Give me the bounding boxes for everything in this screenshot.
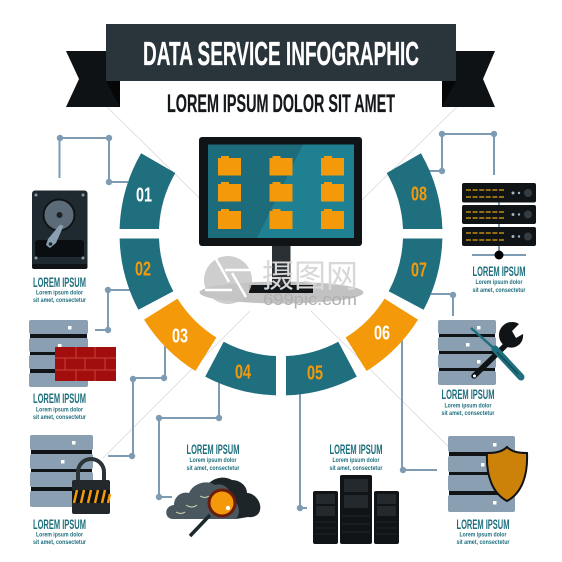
label 3: sit amet, consectetur — [33, 540, 87, 546]
label 6: LOREM IPSUM — [456, 517, 510, 532]
ring of eight numbered segments — [120, 153, 442, 395]
label 4: sit amet, consectetur — [186, 466, 240, 472]
label 1: Lorem ipsum dolor — [36, 290, 84, 296]
label 6: Lorem ipsum dolor — [460, 532, 507, 538]
label 2: sit amet, consectetur — [33, 415, 87, 421]
segment 06: 06 — [374, 322, 390, 344]
ribbon banner — [66, 24, 495, 107]
segment 07: 07 — [411, 260, 427, 282]
label 4: Lorem ipsum dolor — [190, 458, 237, 464]
label 5 — [330, 442, 383, 472]
segment 05 — [286, 342, 357, 395]
label 2: LOREM IPSUM — [33, 391, 86, 406]
label 8: Lorem ipsum dolor — [476, 280, 523, 286]
label 6 — [456, 517, 510, 546]
label 1 — [33, 275, 87, 304]
connector lines — [57, 131, 497, 511]
label 4: LOREM IPSUM — [186, 442, 240, 457]
segment 03 — [144, 299, 216, 371]
label 4 — [186, 442, 240, 472]
segment 04: 04 — [235, 362, 252, 384]
label 3: Lorem ipsum dolor — [36, 532, 84, 538]
icon: monitor with folders — [199, 137, 364, 304]
label 6: sit amet, consectetur — [456, 540, 510, 546]
segment 02: 02 — [135, 258, 151, 280]
segment 08 — [387, 153, 442, 229]
label 3 — [33, 517, 87, 546]
segment 03: 03 — [172, 326, 188, 348]
segment 01: 01 — [136, 184, 152, 206]
watermark — [204, 256, 358, 309]
label 7 — [442, 387, 495, 417]
label 7: LOREM IPSUM — [442, 387, 494, 402]
watermark: 摄图网 — [262, 258, 358, 294]
label 7: Lorem ipsum dolor — [444, 404, 492, 410]
segment 07 — [389, 238, 442, 310]
label 8 — [472, 264, 526, 294]
label 8: sit amet, consectetur — [472, 288, 526, 294]
label 1: LOREM IPSUM — [33, 275, 86, 290]
icon: server towers — [313, 475, 399, 544]
segment 04 — [205, 342, 276, 395]
icon: server with firewall — [29, 320, 116, 387]
segment 05: 05 — [307, 362, 323, 384]
label 2 — [33, 391, 87, 421]
icon: server with tools — [438, 320, 523, 385]
icon: server with padlock — [30, 435, 110, 514]
label 3: LOREM IPSUM — [33, 517, 86, 532]
label 5: Lorem ipsum dolor — [332, 458, 380, 464]
segment 01 — [120, 153, 175, 229]
watermark: 699pic.com — [263, 290, 357, 309]
label 7: sit amet, consectetur — [442, 411, 495, 417]
icon: shield server — [448, 436, 527, 512]
label 5: LOREM IPSUM — [330, 442, 382, 457]
segment 02 — [120, 238, 173, 310]
label 1: sit amet, consectetur — [33, 298, 87, 304]
label 5: sit amet, consectetur — [330, 466, 383, 472]
icon: rack server units — [462, 183, 536, 260]
segment 06 — [346, 299, 418, 371]
subtitle: LOREM IPSUM DOLOR SIT AMET — [167, 90, 395, 118]
icon: hard disk — [32, 190, 88, 269]
segment 08: 08 — [411, 184, 427, 206]
label 2: Lorem ipsum dolor — [36, 408, 84, 414]
icon: cloud with magnifier — [166, 478, 260, 536]
